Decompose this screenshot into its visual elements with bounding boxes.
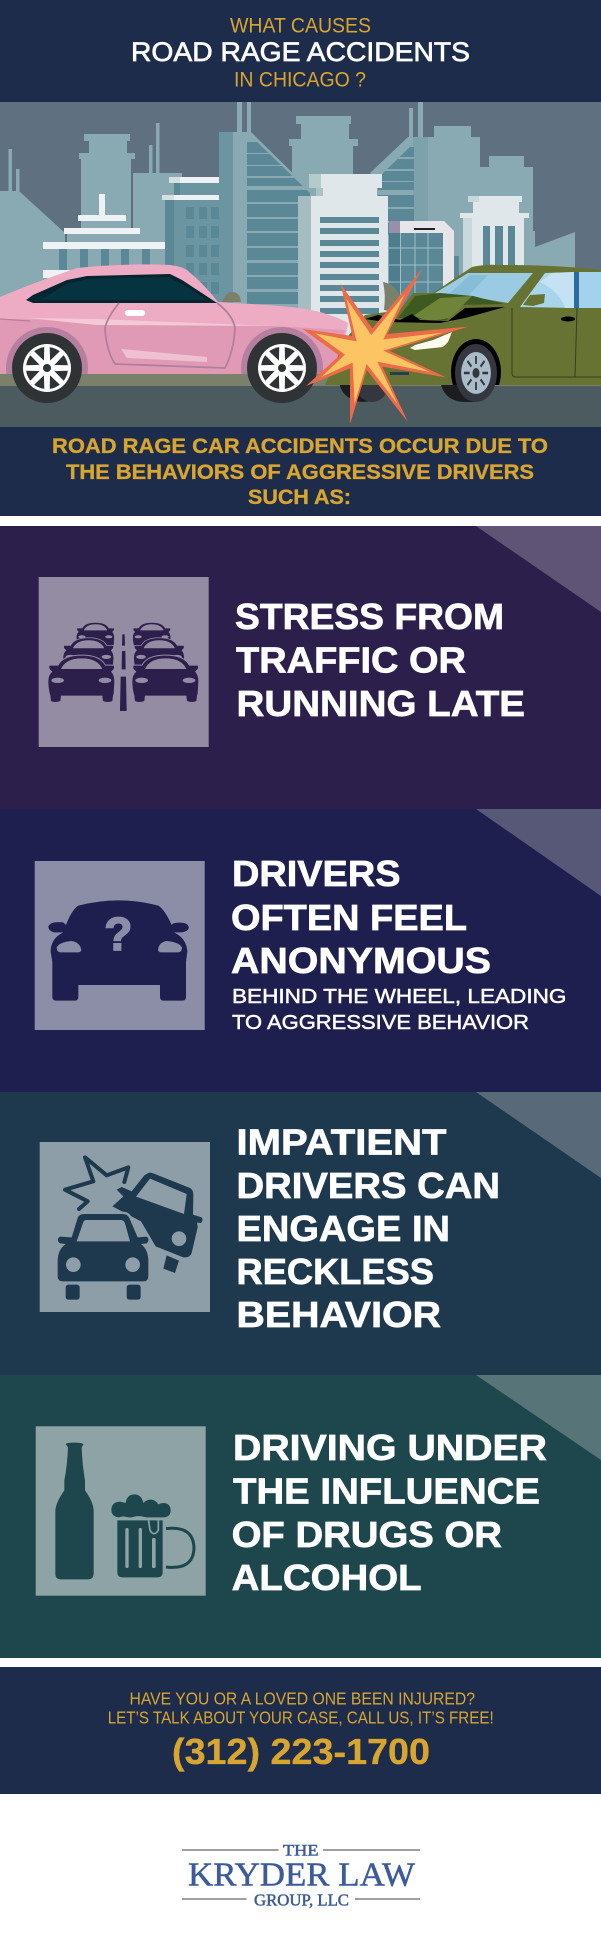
header line: what causes: WHAT CAUSES — [230, 14, 371, 38]
title: ROAD RAGE ACCIDENTS — [131, 37, 470, 67]
panel text: BEHAVIOR — [236, 1294, 441, 1335]
panel text: ALCOHOL — [232, 1557, 422, 1598]
logo — [182, 1843, 420, 1910]
intro band — [0, 427, 601, 516]
collision starburst — [303, 268, 468, 424]
panel text: BEHIND THE WHEEL, LEADING — [232, 986, 566, 1008]
panel text: RUNNING LATE — [236, 683, 525, 724]
panel text: OFTEN FEEL — [231, 897, 467, 938]
door handle — [125, 310, 145, 316]
phone number: (312) 223-1700 — [172, 1731, 430, 1772]
panel text: IMPATIENT — [236, 1122, 446, 1163]
door highlight — [121, 349, 207, 362]
side windows — [520, 272, 574, 308]
panel text: ENGAGE IN — [236, 1208, 450, 1249]
city skyline centre towers — [219, 102, 575, 308]
crumpled hood — [398, 293, 504, 320]
front wheel — [247, 333, 317, 403]
illustration: car crash in front of city skyline — [0, 102, 601, 427]
icon: beer bottle and mug — [55, 1443, 194, 1579]
header banner — [0, 0, 601, 102]
rear wheel — [12, 333, 82, 403]
icon: two cars colliding — [58, 1157, 203, 1300]
door outline — [105, 303, 235, 368]
crease highlight — [28, 318, 273, 326]
panel text: RECKLESS — [236, 1251, 434, 1292]
panel text: STRESS FROM — [235, 596, 504, 637]
bushes — [222, 282, 402, 312]
panel text: THE INFLUENCE — [233, 1471, 540, 1512]
pink car — [0, 264, 348, 409]
header line: in chicago: IN CHICAGO ? — [234, 68, 366, 92]
panel text — [231, 853, 566, 1034]
windshield — [435, 273, 533, 303]
logo: THE — [283, 1843, 318, 1860]
panel: drivers feel anonymous — [0, 809, 601, 1092]
city skyline glass and white buildings — [298, 174, 529, 376]
panel text — [236, 1122, 500, 1335]
panel text: TRAFFIC OR — [236, 640, 466, 680]
panel: impatient drivers — [0, 1092, 601, 1375]
panel text: ANONYMOUS — [231, 940, 491, 981]
panel text — [235, 596, 525, 724]
icon: car with question mark — [48, 900, 189, 1001]
panel: driving under the influence — [0, 1375, 601, 1658]
car window — [26, 274, 217, 303]
intro band: SUCH AS: — [248, 486, 351, 509]
intro band: ROAD RAGE CAR ACCIDENTS OCCUR DUE TO — [52, 435, 548, 458]
green car rear wheel — [451, 339, 501, 405]
green car — [325, 265, 601, 405]
footer call to action: LET’S TALK ABOUT YOUR CASE, CALL US, IT’S FREE! — [108, 1708, 494, 1728]
panel text: DRIVERS — [232, 853, 400, 894]
panel text: DRIVERS CAN — [236, 1165, 500, 1206]
city skyline left — [0, 123, 232, 376]
wheel arches — [6, 327, 323, 374]
panel text — [232, 1427, 547, 1598]
icon: traffic jam — [48, 623, 198, 711]
panel: stress from traffic — [0, 526, 601, 809]
icon: car with question mark: ? — [104, 908, 132, 960]
logo: KRYDER LAW — [188, 1857, 416, 1894]
headlight — [410, 332, 452, 350]
panel text: DRIVING UNDER — [233, 1427, 547, 1468]
intro band: THE BEHAVIORS OF AGGRESSIVE DRIVERS — [66, 461, 534, 484]
footer call to action — [0, 1667, 601, 1794]
footer call to action: HAVE YOU OR A LOVED ONE BEEN INJURED? — [130, 1689, 475, 1709]
panel text: OF DRUGS OR — [232, 1514, 502, 1555]
ground and road — [0, 374, 601, 427]
panel text: TO AGGRESSIVE BEHAVIOR — [232, 1012, 529, 1034]
logo: GROUP, LLC — [254, 1891, 349, 1910]
